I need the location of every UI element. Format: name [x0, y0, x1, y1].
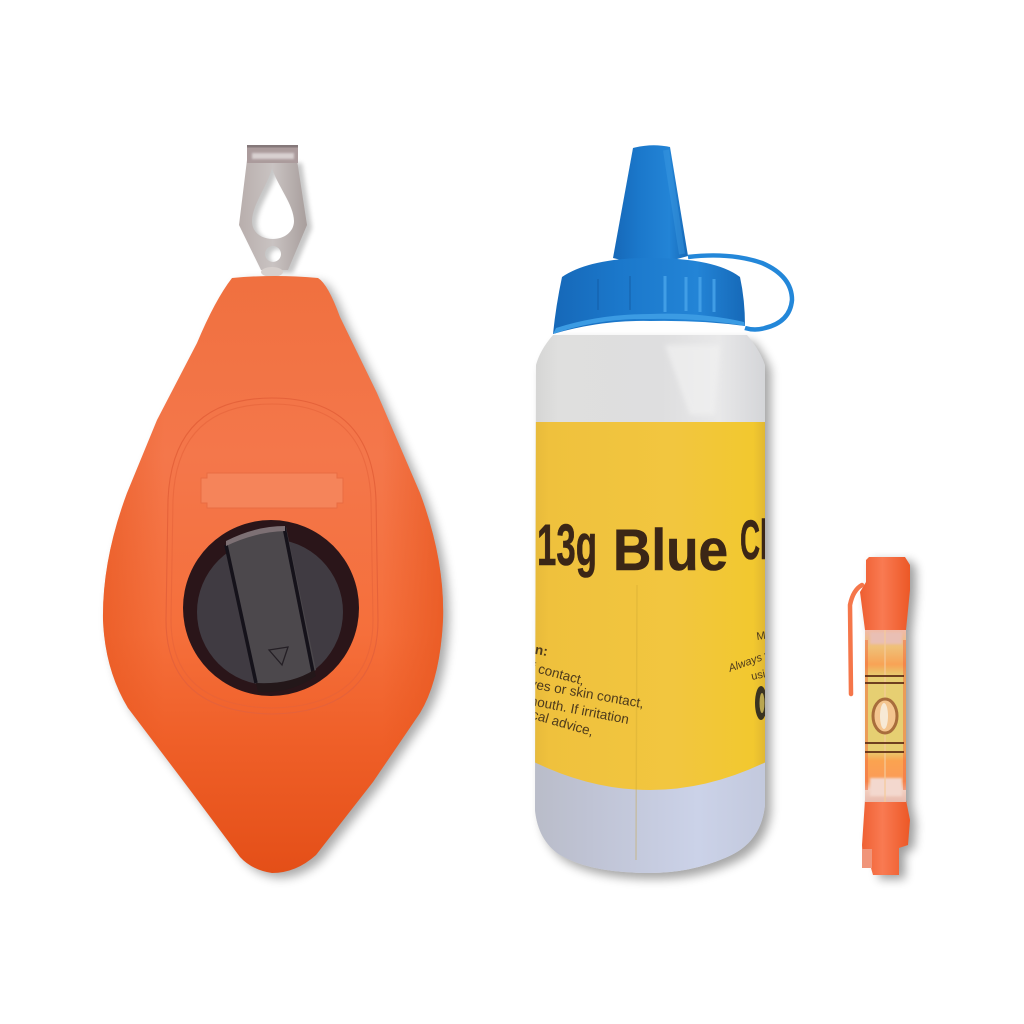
warning text right: using	[750, 666, 778, 683]
bubble	[873, 699, 897, 733]
orange body	[103, 276, 443, 873]
metal hook	[239, 145, 312, 277]
product name: 13g	[537, 513, 597, 578]
level shadow	[866, 561, 916, 879]
label recess	[201, 473, 343, 508]
level flange	[862, 849, 872, 868]
warning text left: eyes or skin contact,	[521, 675, 645, 711]
bottle shadow	[541, 341, 771, 879]
warning text right: Ma	[756, 629, 773, 643]
warning text left: tion:	[518, 639, 549, 659]
warning text left: medical advice,	[502, 699, 595, 739]
translucent highlight	[665, 345, 720, 415]
product name: Blue	[613, 518, 728, 583]
winding knob	[183, 520, 359, 696]
body edge tone	[103, 276, 443, 873]
warning text right: Always wear	[726, 642, 790, 675]
chalk line reel	[103, 145, 449, 878]
recessed panel	[166, 398, 378, 714]
lower bottle tone	[535, 762, 765, 873]
warning text left: mouth. If irritation	[525, 692, 630, 727]
chalk bottle	[502, 145, 792, 880]
pocket clip	[850, 585, 862, 694]
line level	[850, 557, 916, 879]
arrow mark	[269, 647, 288, 665]
reel shadow	[109, 281, 449, 878]
cap strap	[688, 255, 792, 330]
label text	[535, 518, 765, 738]
level casing	[860, 557, 910, 875]
bottle seam	[636, 585, 637, 860]
warning text left	[535, 646, 642, 738]
warning text left: of contact,	[522, 657, 586, 688]
bottle body	[535, 335, 765, 873]
blue screw cap	[553, 258, 745, 334]
blue spout	[613, 145, 688, 263]
level vial	[865, 630, 906, 802]
logo mark	[755, 686, 765, 720]
label text: Ch	[740, 508, 777, 571]
warning text right	[730, 631, 765, 680]
yellow label	[530, 422, 770, 790]
